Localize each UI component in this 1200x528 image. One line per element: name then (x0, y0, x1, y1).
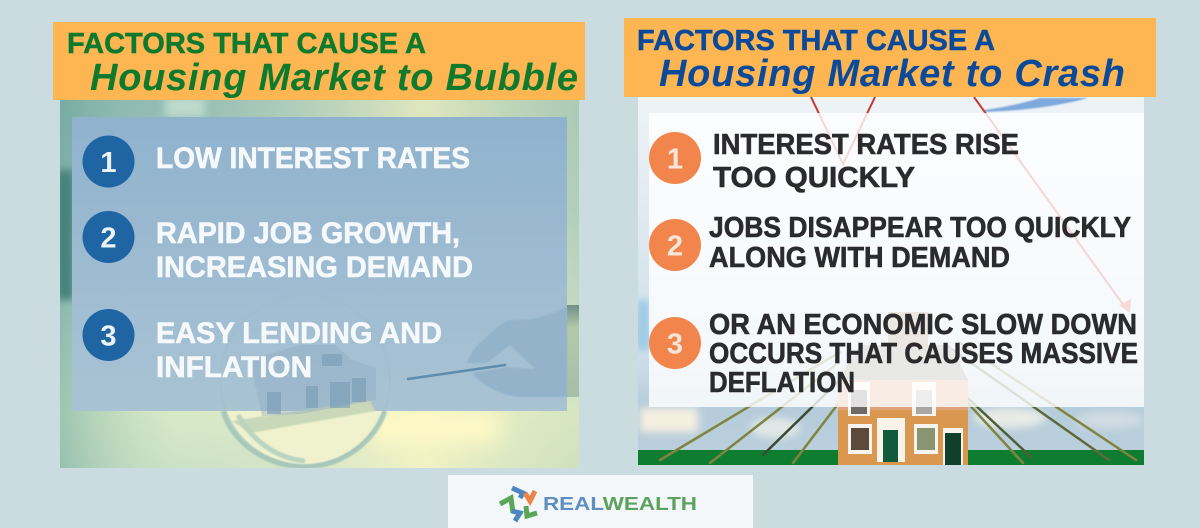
item 3: economic slow down: OR AN ECONOMIC SLOW DOWN (709, 309, 1137, 341)
item 2: jobs disappear: ALONG WITH DEMAND (709, 242, 1010, 274)
item 2: jobs disappear: JOBS DISAPPEAR TOO QUICKLY (709, 212, 1131, 244)
photo: house inside a soap bubble with a pin (56, 96, 579, 468)
header: crash: Housing Market to Crash (659, 53, 1125, 95)
item 1: interest rates rise: INTEREST RATES RISE (713, 129, 1019, 161)
item 3: easy lending: INFLATION (156, 351, 312, 384)
item 2: jobs disappear: 2 (667, 230, 683, 262)
item 3: economic slow down: DEFLATION (709, 367, 855, 399)
bubble with house (220, 295, 567, 471)
logo: RealWealth (448, 475, 753, 528)
item 2: jobs disappear (649, 212, 1131, 274)
item 1: low interest rates (82, 136, 470, 188)
icon: RealWealth arrows mark (500, 488, 537, 521)
item 2: rapid job growth: INCREASING DEMAND (156, 251, 473, 284)
photo: house tied down with ropes under a red falling chart (636, 97, 1145, 465)
panel: housing crash factors (624, 18, 1156, 465)
item 3: economic slow down: OCCURS THAT CAUSES MASSIVE (709, 338, 1138, 370)
item 2: rapid job growth: 2 (100, 222, 117, 254)
translucent list card (72, 117, 567, 411)
item 1: interest rates rise: TOO QUICKLY (713, 162, 915, 194)
item 2: rapid job growth (82, 211, 473, 284)
header: bubble: FACTORS THAT CAUSE A (67, 28, 426, 60)
header: bubble (53, 22, 585, 100)
header: crash (624, 18, 1156, 97)
item 2: rapid job growth: RAPID JOB GROWTH, (156, 217, 460, 250)
item 3: easy lending: EASY LENDING AND (156, 317, 442, 350)
item 1: low interest rates: 1 (100, 147, 117, 179)
panel: housing bubble factors (53, 22, 585, 471)
header: bubble: Housing Market to Bubble (90, 57, 578, 99)
wordmark: REAL WEALTH (543, 494, 697, 514)
item 3: easy lending (82, 309, 442, 384)
item 3: economic slow down (649, 309, 1138, 399)
item 1: interest rates rise (649, 129, 1019, 194)
item 1: interest rates rise: 1 (667, 144, 683, 176)
item 3: economic slow down: 3 (667, 328, 683, 360)
item 1: low interest rates: LOW INTEREST RATES (156, 142, 470, 175)
header: crash: FACTORS THAT CAUSE A (637, 25, 995, 57)
translucent list card (649, 113, 1144, 407)
item 3: easy lending: 3 (100, 320, 117, 352)
